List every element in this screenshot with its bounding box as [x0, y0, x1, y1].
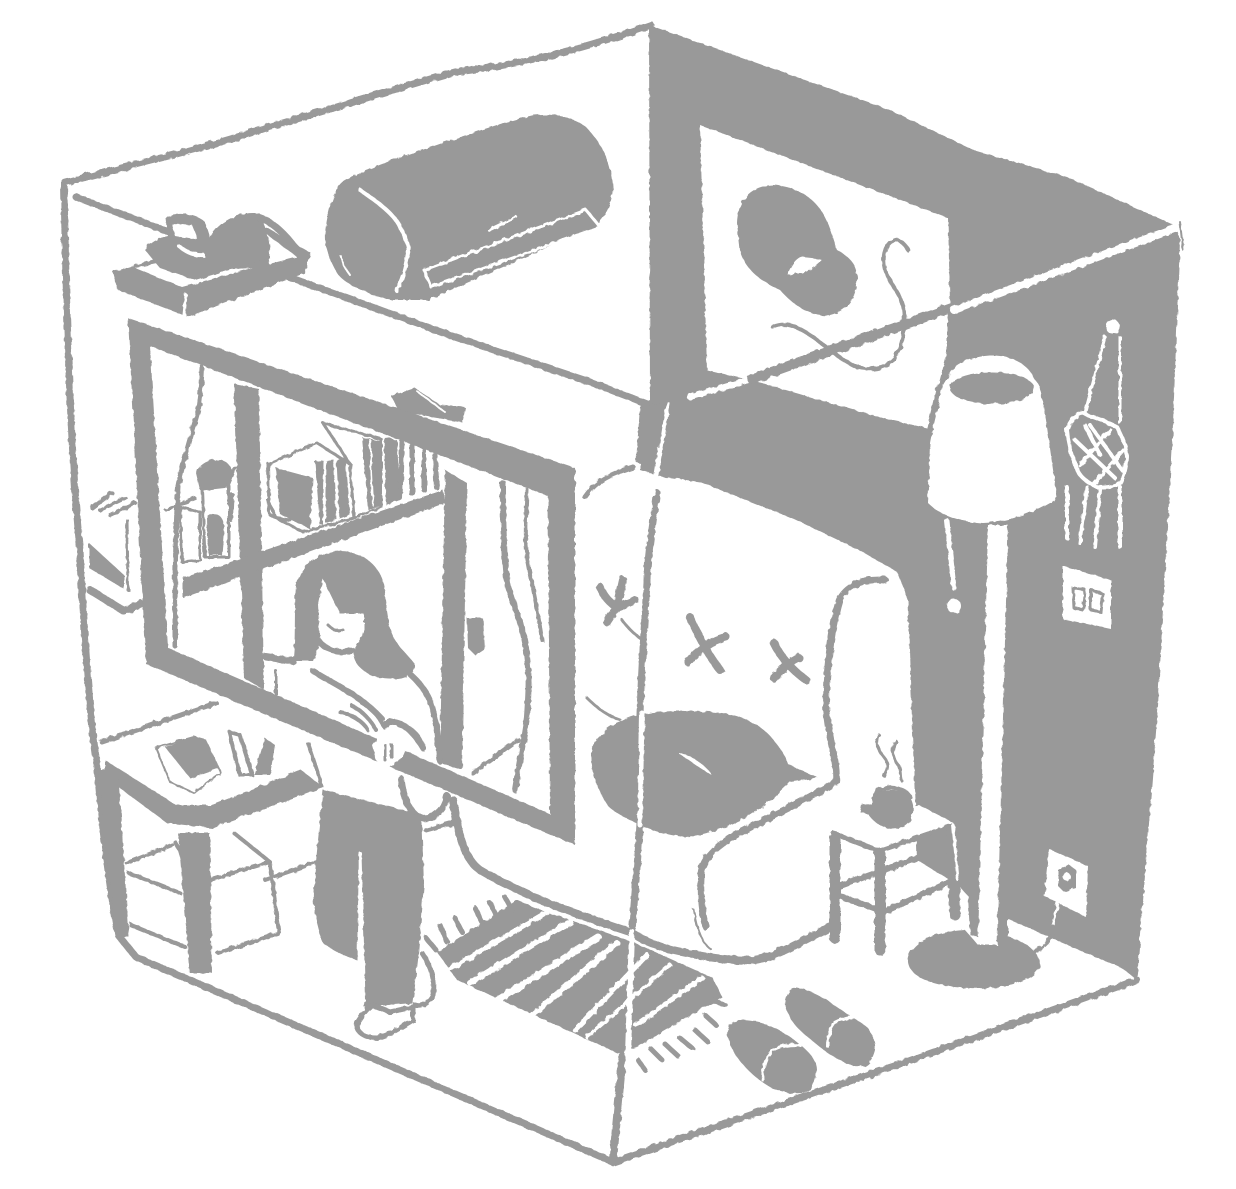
cube vertical seam over armchair: [628, 403, 668, 1070]
mirror contents: [166, 368, 542, 790]
air conditioner: [325, 115, 613, 300]
steam: [877, 735, 902, 781]
rear shoe: [415, 953, 434, 1006]
woman: [266, 551, 447, 1038]
front shoe: [357, 1005, 413, 1038]
book on table: [156, 737, 221, 793]
hand fingers: [340, 703, 384, 730]
side table: [98, 703, 323, 973]
bottle and jars: [196, 460, 240, 490]
wall shelf with tray items: [113, 213, 311, 316]
slippers: [728, 988, 875, 1093]
striped rug: [426, 897, 725, 1070]
rug fringe: [426, 897, 725, 1070]
hair: [293, 551, 415, 679]
left wall cabinet: [89, 492, 141, 611]
teapot: [860, 790, 913, 829]
face and collar: [319, 584, 362, 650]
sweater: [266, 660, 445, 820]
items on top of frame: [391, 388, 465, 422]
hand over frame: [372, 725, 423, 770]
macrame wall hanging: [1067, 320, 1127, 547]
storage box under table: [127, 833, 317, 953]
wall outlet: [1033, 849, 1088, 951]
window latch: [467, 618, 485, 656]
floor lines behind woman: [426, 822, 455, 830]
trousers: [313, 790, 424, 1007]
stool with teapot: [833, 735, 958, 950]
lower sleeve: [401, 779, 447, 818]
books on shelf: [268, 443, 354, 532]
wall switch: [1063, 566, 1111, 629]
tufted buttons: [600, 580, 806, 680]
mirror frame: [128, 318, 575, 845]
seat cushion: [591, 711, 818, 837]
pens: [229, 732, 252, 775]
armchair: [453, 467, 885, 960]
right curtain: [503, 483, 529, 790]
cube edge across dark wall: [690, 228, 1176, 397]
left curtain: [175, 368, 202, 646]
dark back and right walls: [640, 25, 1180, 980]
wall picture with yarn ball: [700, 125, 950, 428]
pull cord: [947, 521, 954, 588]
floor lamp: [908, 356, 1057, 988]
